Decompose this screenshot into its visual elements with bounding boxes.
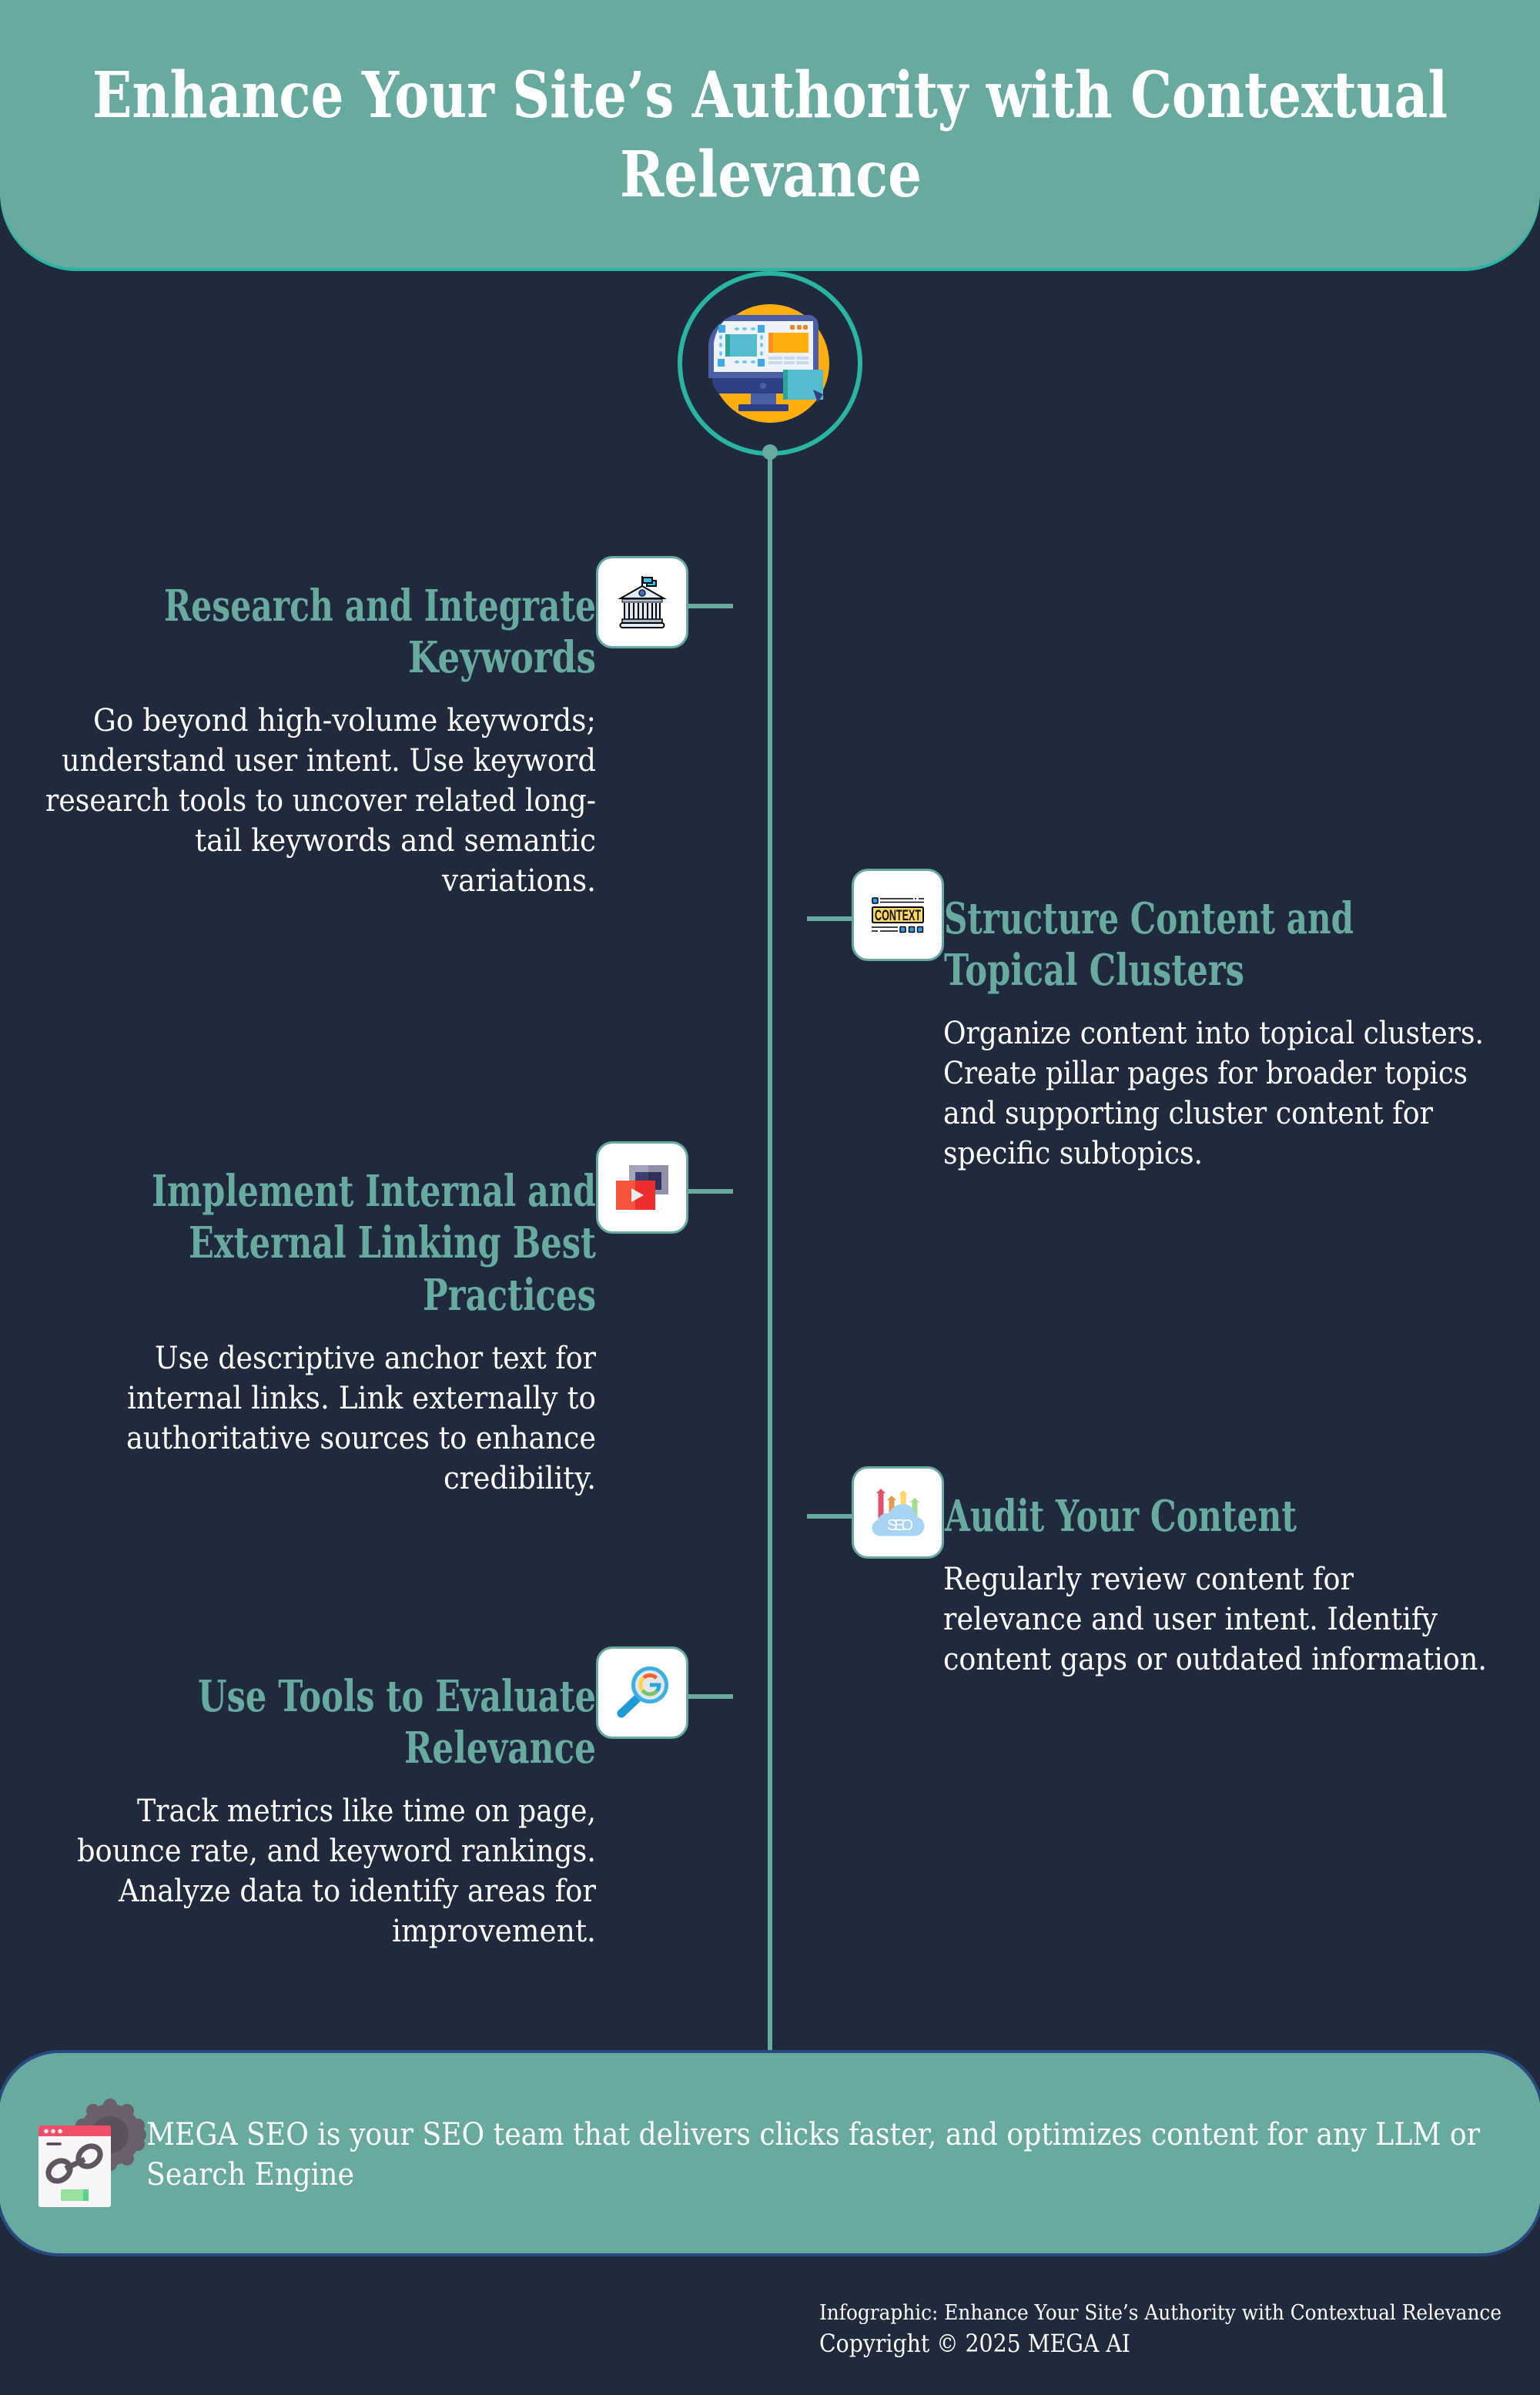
description: improvement. <box>392 1914 596 1949</box>
heading: External Linking Best <box>189 1218 596 1268</box>
footer credits: Infographic: Enhance Your Site’s Authority with Contextual Relevance <box>819 2301 1502 2325</box>
icon box: seo cloud <box>853 1468 942 1557</box>
step 5: use tools to evaluate relevance <box>77 1648 733 1949</box>
heading <box>944 893 1354 996</box>
description: content gaps or outdated information. <box>943 1642 1487 1677</box>
description: specific subtopics. <box>943 1136 1203 1171</box>
description: tail keywords and semantic <box>195 823 596 859</box>
connector <box>807 1514 852 1519</box>
footer credits: Copyright © 2025 MEGA AI <box>819 2329 1130 2358</box>
timeline vertical line <box>768 451 772 2053</box>
icon box: context <box>853 870 942 960</box>
description <box>943 1016 1484 1171</box>
description: and supporting cluster content for <box>943 1096 1434 1131</box>
description: understand user intent. Use keyword <box>62 743 596 779</box>
heading: Keywords <box>408 632 596 683</box>
description: authoritative sources to enhance <box>126 1421 596 1456</box>
heading: Audit Your Content <box>944 1491 1297 1542</box>
description: Go beyond high-volume keywords; <box>93 703 596 739</box>
heading: Research and Integrate <box>164 581 596 631</box>
description <box>45 703 596 899</box>
description: Create pillar pages for broader topics <box>943 1056 1468 1091</box>
header banner <box>0 0 1540 271</box>
description <box>943 1562 1487 1677</box>
heading <box>164 581 596 683</box>
description: Use descriptive anchor text for <box>155 1341 597 1376</box>
step 2: structure content and topical clusters <box>807 870 1484 1171</box>
heading <box>152 1166 596 1321</box>
heading: Practices <box>423 1270 596 1321</box>
title: Relevance <box>620 138 922 212</box>
heading: Implement Internal and <box>152 1166 596 1217</box>
heading <box>198 1671 596 1774</box>
connector <box>688 1694 733 1699</box>
heading: Use Tools to Evaluate <box>198 1671 596 1722</box>
description: Organize content into topical clusters. <box>943 1016 1484 1051</box>
icon box: context: CONTEXT <box>875 908 921 924</box>
description: credibility. <box>444 1461 596 1496</box>
banner text: Search Engine <box>146 2157 354 2192</box>
description: Track metrics like time on page, <box>137 1794 596 1829</box>
description: Regularly review content for <box>943 1562 1354 1597</box>
step 4: audit your content <box>807 1468 1487 1677</box>
connector <box>807 916 852 921</box>
description: Analyze data to identify areas for <box>118 1874 597 1909</box>
description: internal links. Link externally to <box>127 1381 596 1416</box>
icon box: google magnifier <box>598 1648 687 1737</box>
connector <box>688 604 733 608</box>
connector <box>688 1189 733 1194</box>
heading: Topical Clusters <box>944 945 1244 996</box>
icon box: seo cloud: SEO <box>887 1517 913 1534</box>
bottom banner <box>0 2052 1540 2255</box>
heading: Structure Content and <box>944 893 1354 944</box>
heading: Relevance <box>404 1723 596 1774</box>
description: variations. <box>441 863 596 899</box>
banner text <box>146 2117 1481 2192</box>
step 1: research and integrate keywords <box>45 558 733 899</box>
description: relevance and user intent. Identify <box>943 1602 1438 1637</box>
icon box: bank building <box>598 558 687 647</box>
step 3: implement linking best practices <box>126 1143 733 1496</box>
hero icon: monitor in circle <box>680 273 860 460</box>
footer credits <box>819 2301 1502 2358</box>
description: research tools to uncover related long- <box>45 783 596 819</box>
description <box>126 1341 597 1496</box>
icon: web page chain link with gear <box>38 2099 146 2207</box>
description <box>77 1794 597 1949</box>
description: bounce rate, and keyword rankings. <box>77 1834 596 1869</box>
title <box>92 59 1448 212</box>
icon box: video layers <box>598 1143 687 1232</box>
